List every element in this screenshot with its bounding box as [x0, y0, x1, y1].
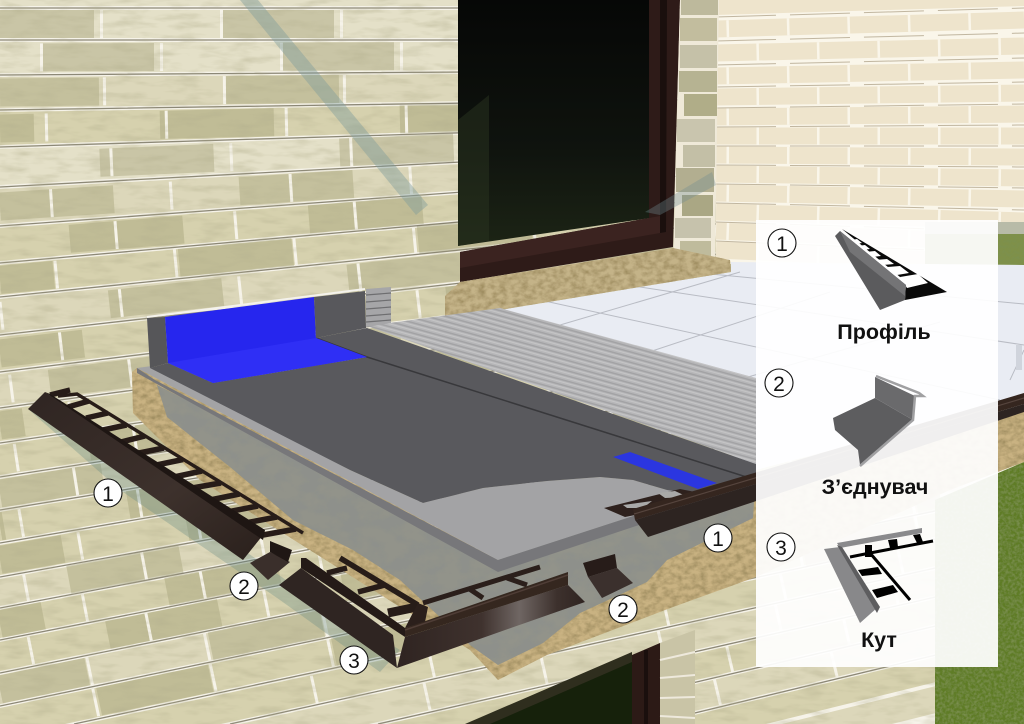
callout 2 centre: 2 [617, 599, 629, 622]
sand plaster layer [132, 368, 1024, 680]
legend item: profile: 1 [776, 233, 788, 256]
window with dark glass and brown frame [458, 0, 680, 282]
callout 3 bottom: 3 [348, 650, 360, 673]
window sill [445, 248, 731, 318]
legend item: corner [767, 528, 933, 652]
left connector [250, 541, 292, 580]
callout 2 left: 2 [238, 576, 250, 599]
reflection of glass railing on wall [240, 0, 428, 215]
brick corner column [645, 0, 719, 262]
legend item: profile: Профіль [837, 320, 931, 344]
legend item: corner: Кут [861, 628, 897, 652]
grass background right [925, 222, 1024, 724]
right connector [583, 554, 633, 598]
legend item: profile [768, 229, 947, 344]
right edge profile [604, 393, 1024, 537]
legend item: connector: 2 [773, 373, 785, 396]
lower window opening [465, 630, 695, 724]
callout 1 right [704, 524, 732, 552]
callout 1 left [94, 479, 122, 507]
corrugated drainage mat [367, 308, 756, 464]
blue membrane strip at edge [613, 452, 717, 489]
floor railing post [1016, 345, 1022, 370]
dark waterproof membrane [150, 328, 756, 503]
tiled terrace floor [500, 262, 1024, 470]
upstand with blue membrane [147, 289, 367, 383]
callout 2 left [230, 572, 258, 600]
callout 1 right: 1 [712, 528, 724, 551]
legend panel [756, 220, 998, 667]
right wall bricks [716, 0, 1024, 264]
panel background [756, 220, 998, 667]
screed slab [137, 366, 756, 572]
teal shadow under left profile [28, 409, 400, 672]
louvred drainage strip on wall [366, 287, 391, 327]
legend item: connector [765, 369, 928, 499]
legend item: corner: 3 [775, 537, 787, 560]
callout 1 left: 1 [102, 483, 114, 506]
concrete slab [157, 385, 756, 665]
callout 3 bottom [340, 646, 368, 674]
legend item: connector: З’єднувач [822, 475, 928, 499]
left edge profile [28, 390, 303, 560]
corner profile [279, 558, 585, 668]
membrane overlap line [316, 338, 756, 480]
callout 2 centre [609, 595, 637, 623]
